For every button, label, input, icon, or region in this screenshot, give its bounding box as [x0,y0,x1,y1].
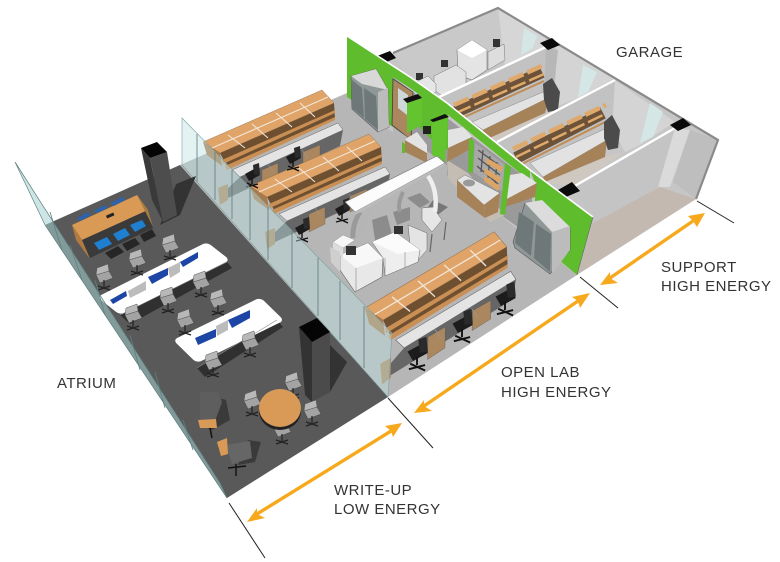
central equipment [330,193,448,292]
lounge chair 1 [198,392,230,438]
label: write-up low energy: WRITE-UP [334,482,412,499]
label: open lab high energy: OPEN LAB [501,364,580,381]
sink counter 1 [405,132,427,163]
label: open lab high energy: HIGH ENERGY [501,384,612,401]
green between piers [420,90,448,150]
floor gap between piers [393,127,447,175]
left green strip [402,135,405,153]
room 3 back wall [497,80,615,172]
label: write-up low energy: LOW ENERGY [334,501,441,518]
column caps [377,38,691,197]
counter behind opening 3 [505,173,537,200]
label: garage: GARAGE [616,44,683,61]
column 1 [141,142,196,225]
chairs around tables [96,234,259,377]
panel: garage rooms [347,6,719,275]
pier 2 cap [430,114,449,122]
room 2 divider cap [437,47,546,98]
white overhead canopy [345,156,445,215]
counter behind opening 1 [448,127,472,148]
room 2 floor [485,98,578,142]
room 2 column [544,48,558,98]
gas cylinders [543,78,560,112]
bench C [364,230,517,386]
task chairs [245,146,516,370]
label: atrium: ATRIUM [57,375,116,392]
wall pilaster [658,128,690,187]
arrow: support [600,213,705,285]
room 2 shelves [454,65,544,120]
column 2 [299,318,347,402]
wall end edge [577,217,593,275]
floor: open lab [180,93,577,397]
back room wall [393,8,505,97]
duct arcs [353,176,436,238]
front garage wall [573,128,675,223]
green post 4 [500,163,511,215]
right wall panel [530,170,593,275]
fridge left [351,69,389,132]
door window [398,88,408,115]
blue stools [94,220,146,250]
room 2 side wall [553,44,615,108]
room 3 side wall [612,80,675,152]
tick marks [229,201,734,558]
table 1 [97,242,230,315]
back room equipment [412,39,505,98]
arrow: open lab [414,293,590,413]
fridge right [513,200,570,274]
green post 3 [468,138,474,173]
kitchen stool bases [105,229,156,259]
left wall panel [347,36,393,127]
cabinet behind opening 3 [505,183,537,207]
monitor between piers [423,126,431,134]
back room side wall [498,8,546,66]
garage base [347,8,718,275]
kitchen counter [72,195,153,259]
table 2 [173,297,284,368]
room 3 shelves [513,105,606,165]
arrow: write-up [247,423,402,522]
exterior wall outline [393,8,718,199]
door [392,79,413,140]
room 3 floor [545,152,625,187]
table 1 blue screens [110,252,198,304]
floor: support garage corridor [578,187,696,274]
pier 1 cap [403,94,422,103]
end wall [673,130,718,198]
back room window [521,28,537,55]
bench A [203,90,343,205]
lounge chair 2 [217,438,261,476]
cabinet behind opening 1 [447,137,472,162]
room 2 counter [472,90,550,140]
room 3 window [640,103,663,143]
floor: write-up atrium [45,165,388,498]
room 2 back wall [437,47,546,126]
green pier 1 [407,98,422,133]
table 1 shadow [120,262,232,324]
openings backdrop [393,77,536,240]
glass wall: atrium [15,162,227,498]
round table with chairs [244,372,321,444]
room 3 gas cylinders [604,115,620,150]
grid lines [477,150,500,185]
back stools [77,197,125,221]
room 3 divider cap [497,80,615,142]
bench B [250,134,390,249]
sink counter 2 [457,175,500,218]
beige floor at wall base [447,160,505,222]
upper band [393,66,530,181]
label: support high energy: SUPPORT [661,259,737,276]
white wall top line [347,36,593,217]
room 3 counter [530,128,607,182]
label: support high energy: HIGH ENERGY [661,278,772,295]
table 2 blue screens [195,310,250,345]
panel: green wall with openings [347,36,593,275]
table 2 shadow [197,320,283,377]
angled shelves [484,158,503,191]
green pier 2 [432,118,448,162]
glass wall: lab partition [182,118,392,397]
room 2 window [578,65,597,97]
grid opening [473,143,505,192]
